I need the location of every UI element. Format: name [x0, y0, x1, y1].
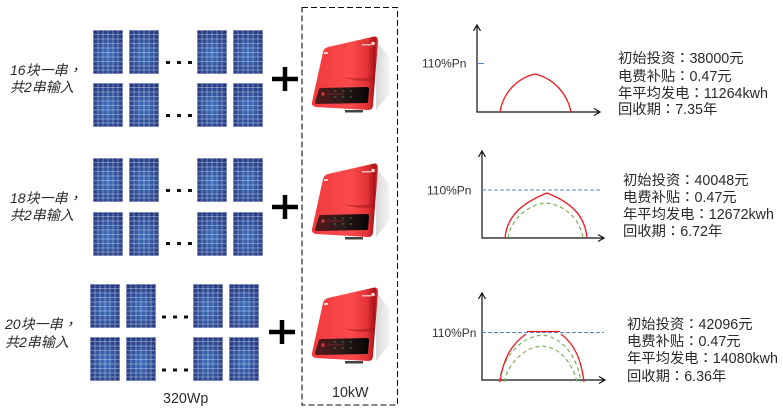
row 2: figures: 初始投资：40048元 — [623, 169, 749, 190]
row 1: figures: 回收期：7.35年 — [618, 98, 717, 119]
row 3: string label: 20块一串， — [4, 314, 77, 334]
row 3: inverter — [312, 288, 390, 364]
row 2: power chart — [427, 151, 604, 242]
row 2: inverter — [312, 164, 390, 240]
row 2: string label: 18块一串， — [10, 188, 82, 208]
inverter rating label: 10kW — [332, 385, 369, 401]
row 3: figures — [627, 313, 778, 386]
row 1: power chart: 110%Pn — [422, 56, 466, 70]
row 2: figures: 回收期：6.72年 — [623, 220, 722, 241]
row 3: string label — [4, 314, 77, 350]
row 1: plus sign — [272, 67, 298, 91]
row 1: inverter — [312, 36, 390, 112]
row 1: string label: 共2串输入 — [10, 79, 74, 95]
row 3: string label: 共2串输入 — [5, 334, 69, 350]
row 3: power chart — [432, 293, 605, 384]
row 1: PV array — [93, 30, 263, 127]
row 2: string label: 共2串输入 — [10, 207, 74, 223]
row 3: figures: 初始投资：42096元 — [627, 313, 753, 334]
row 1: string label — [10, 60, 82, 95]
row 3: figures: 电费补贴：0.47元 — [627, 330, 741, 351]
row 1: string label: 16块一串， — [10, 60, 82, 80]
row 1: figures: 电费补贴：0.47元 — [618, 65, 732, 86]
row 3: plus sign — [269, 320, 295, 344]
row 3: power chart: 110%Pn — [432, 326, 476, 340]
row 2: figures — [623, 169, 774, 241]
row 1: figures — [618, 47, 768, 119]
row 2: plus sign — [272, 195, 298, 219]
row 1: figures: 初始投资：38000元 — [618, 47, 744, 68]
row 3: figures: 回收期：6.36年 — [627, 365, 726, 386]
row 2: figures: 电费补贴：0.47元 — [623, 186, 737, 207]
row 2: figures: 年平均发电：12672kwh — [623, 203, 774, 224]
row 1: figures: 年平均发电：11264kwh — [618, 82, 768, 103]
row 2: string label — [10, 188, 82, 223]
panel rating label: 320Wp — [163, 391, 208, 407]
row 1: power chart — [422, 25, 600, 116]
dashed inverter box — [302, 8, 398, 405]
row 2: power chart: 110%Pn — [427, 184, 471, 198]
row 3: PV array — [90, 284, 259, 381]
row 2: PV array — [93, 158, 263, 256]
row 3: figures: 年平均发电：14080kwh — [627, 347, 778, 368]
